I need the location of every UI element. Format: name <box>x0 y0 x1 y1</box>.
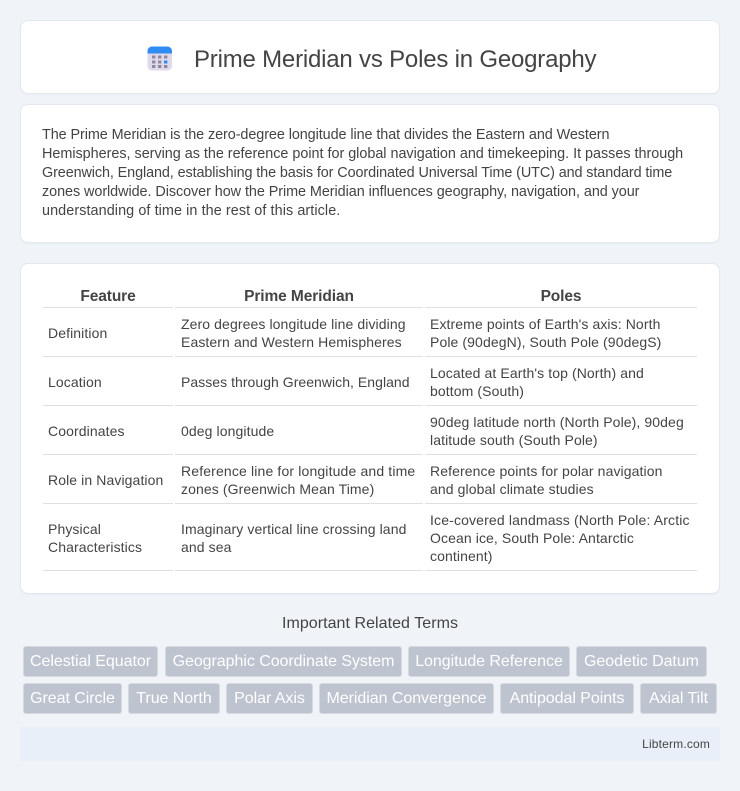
related terms tags <box>23 646 717 714</box>
tag: Polar Axis <box>234 690 305 707</box>
row: Role in Navigation: Reference line for longitude and time <box>181 463 415 479</box>
row: Definition: Definition <box>48 325 107 341</box>
row: Definition: Zero degrees longitude line dividing <box>181 316 406 332</box>
row: Definition: Pole (90degN), South Pole (90degS) <box>430 334 661 350</box>
related terms heading: Important Related Terms <box>282 615 458 632</box>
row: Definition <box>48 316 661 350</box>
tag <box>128 683 220 714</box>
column heading: Poles: Poles <box>541 288 581 305</box>
tag <box>408 646 570 677</box>
tag <box>640 683 717 714</box>
row: Role in Navigation: zones (Greenwich Mean Time) <box>181 481 374 497</box>
intro line 1: The Prime Meridian is the zero-degree longitude line that divides the Eastern and Western <box>42 127 609 143</box>
row: Physical Characteristics <box>48 512 690 564</box>
row: Coordinates: latitude south (South Pole) <box>430 432 598 448</box>
row: Role in Navigation: Reference points for polar navigation <box>430 463 663 479</box>
row: Coordinates: 0deg longitude <box>181 423 274 439</box>
row: Physical Characteristics: continent) <box>430 548 492 564</box>
row: Physical Characteristics: Ocean ice, South Pole: Antarctic <box>430 530 634 546</box>
comparison table panel <box>20 263 720 594</box>
row: Definition: Eastern and Western Hemispheres <box>181 334 402 350</box>
tag: True North <box>136 690 212 707</box>
tag <box>226 683 313 714</box>
intro text panel <box>20 104 720 243</box>
column heading: Feature: Feature <box>80 288 136 305</box>
tag <box>319 683 494 714</box>
row: Location: Passes through Greenwich, England <box>181 374 410 390</box>
tag: Celestial Equator <box>30 653 151 670</box>
row: Definition: Extreme points of Earth's axis: North <box>430 316 660 332</box>
tag: Longitude Reference <box>415 653 563 670</box>
row: Coordinates: 90deg latitude north (North Pole), 90deg <box>430 414 684 430</box>
row: Coordinates <box>48 414 684 448</box>
row: Physical Characteristics: and sea <box>181 539 232 555</box>
intro line 5: understanding of time in the rest of this article. <box>42 203 340 219</box>
intro line 2: Hemispheres, serving as the reference point for global navigation and timekeeping. It passes through <box>42 146 683 162</box>
tag: Geodetic Datum <box>584 653 699 670</box>
column heading: Prime Meridian: Prime Meridian <box>244 288 354 305</box>
row: Physical Characteristics: Imaginary vertical line crossing land <box>181 521 406 537</box>
intro line 3: Greenwich, England, establishing the basis for Coordinated Universal Time (UTC) and standard time <box>42 165 672 181</box>
row: Physical Characteristics: Ice-covered landmass (North Pole: Arctic <box>430 512 690 528</box>
tag <box>23 683 122 714</box>
row: Physical Characteristics: Physical <box>48 521 101 537</box>
row: Coordinates: Coordinates <box>48 423 125 439</box>
tag <box>576 646 707 677</box>
row: Location <box>48 365 644 399</box>
tag: Great Circle <box>30 690 115 707</box>
tag: Antipodal Points <box>510 690 624 707</box>
row: Physical Characteristics: Characteristics <box>48 539 142 555</box>
row: Location: bottom (South) <box>430 383 524 399</box>
icon: calendar <box>148 46 172 70</box>
intro line 4: zones worldwide. Discover how the Prime Meridian influences geography, navigation, and your <box>42 184 639 200</box>
title: Prime Meridian vs Poles in Geography <box>194 46 596 73</box>
footer credit: Libterm.com <box>642 737 710 751</box>
row: Role in Navigation: Role in Navigation <box>48 472 163 488</box>
row: Location: Located at Earth's top (North) and <box>430 365 644 381</box>
tag <box>23 646 158 677</box>
footer bar <box>20 727 720 761</box>
tag: Meridian Convergence <box>326 690 486 707</box>
row: Location: Location <box>48 374 102 390</box>
tag: Geographic Coordinate System <box>173 653 394 670</box>
tag <box>165 646 402 677</box>
header panel <box>20 20 720 94</box>
row: Role in Navigation <box>48 463 663 497</box>
row: Role in Navigation: and global climate studies <box>430 481 594 497</box>
tag: Axial Tilt <box>649 690 708 707</box>
tag <box>500 683 634 714</box>
